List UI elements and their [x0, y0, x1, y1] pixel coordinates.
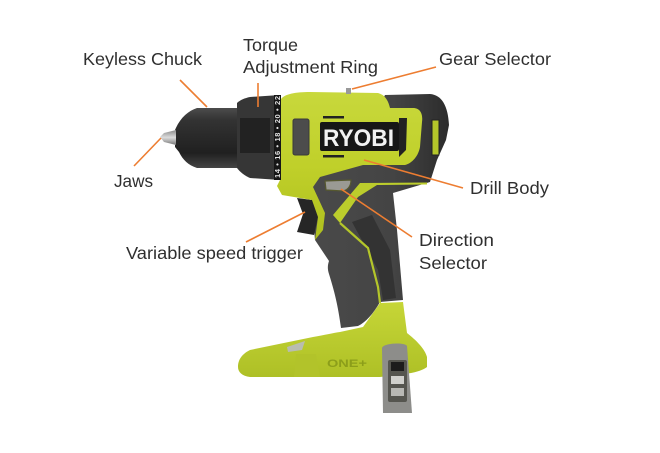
label: direction selector: Direction — [419, 230, 494, 250]
label: variable speed trigger: Variable speed trigger — [126, 243, 303, 263]
label: jaws: Jaws — [114, 171, 153, 191]
drill: direction selector surround — [333, 182, 427, 223]
label: drill body: Drill Body — [470, 178, 549, 198]
drill: chuck sleeve — [175, 108, 237, 168]
drill illustration — [160, 88, 449, 413]
drill: body shell — [277, 92, 422, 240]
label: gear selector: Gear Selector — [439, 49, 551, 69]
line: torque ring — [257, 83, 259, 107]
drill: jaws tip — [160, 130, 176, 145]
line: keyless chuck — [180, 80, 207, 107]
drill: collar ring numbers: 14 • 16 • 18 • 20 • 22 — [273, 96, 282, 178]
annotation lines — [134, 67, 463, 242]
label: torque adjustment ring: Adjustment Ring — [243, 57, 378, 77]
label: direction selector: Selector — [419, 253, 487, 273]
drill: logo badge: RYOBI — [323, 125, 394, 152]
label: torque adjustment ring: Torque — [243, 35, 298, 55]
drill: trigger — [297, 198, 318, 235]
drill: grip inner panel — [352, 215, 396, 300]
drill: metal tab — [287, 341, 305, 352]
line: jaws — [134, 138, 161, 166]
drill: grip green stripe — [340, 223, 380, 303]
line: drill body — [364, 160, 463, 188]
drill: direction selector — [325, 180, 351, 191]
drill: gear selector knob — [346, 88, 351, 94]
drill: belt clip — [382, 344, 412, 413]
drill: speed-lock button — [293, 119, 309, 155]
drill: rear housing and grip — [310, 94, 449, 328]
drill: ONE+ logo: ONE+ — [327, 358, 367, 370]
line: direction selector — [341, 189, 412, 237]
line: gear selector — [352, 67, 436, 89]
drill: vent slots — [323, 116, 407, 158]
drill: base shadow detail — [294, 354, 320, 377]
label: keyless chuck: Keyless Chuck — [83, 49, 202, 69]
drill: torque collar — [237, 95, 280, 180]
line: variable speed trigger — [246, 212, 305, 242]
drill: collar recess — [240, 118, 270, 153]
drill: rear green window — [432, 120, 439, 155]
drill: battery base — [238, 302, 427, 377]
